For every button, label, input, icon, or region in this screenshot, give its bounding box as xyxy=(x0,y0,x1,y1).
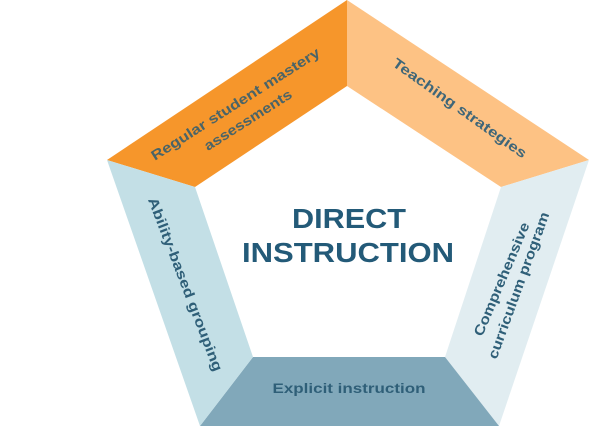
panel: ability-based grouping xyxy=(107,160,253,426)
panel: regular student mastery assessments xyxy=(107,0,347,187)
panel: comprehensive curriculum program xyxy=(445,160,589,426)
panel: teaching strategies xyxy=(347,0,589,187)
label: comprehensive curriculum program: Comprehensive xyxy=(470,220,533,338)
panel: explicit instruction xyxy=(200,357,499,426)
title: INSTRUCTION xyxy=(242,237,454,268)
label: explicit instruction: Explicit instruction xyxy=(272,380,426,396)
label: teaching strategies: Teaching strategies xyxy=(390,55,530,161)
label: ability-based grouping: Ability-based grouping xyxy=(145,195,226,373)
title xyxy=(242,203,454,268)
label: regular student mastery assessments: assessments xyxy=(201,86,295,154)
label: comprehensive curriculum program xyxy=(470,210,552,361)
label: comprehensive curriculum program: curriculum program xyxy=(484,210,552,361)
title: DIRECT xyxy=(292,203,406,234)
label: regular student mastery assessments: Regular student mastery xyxy=(148,44,323,163)
